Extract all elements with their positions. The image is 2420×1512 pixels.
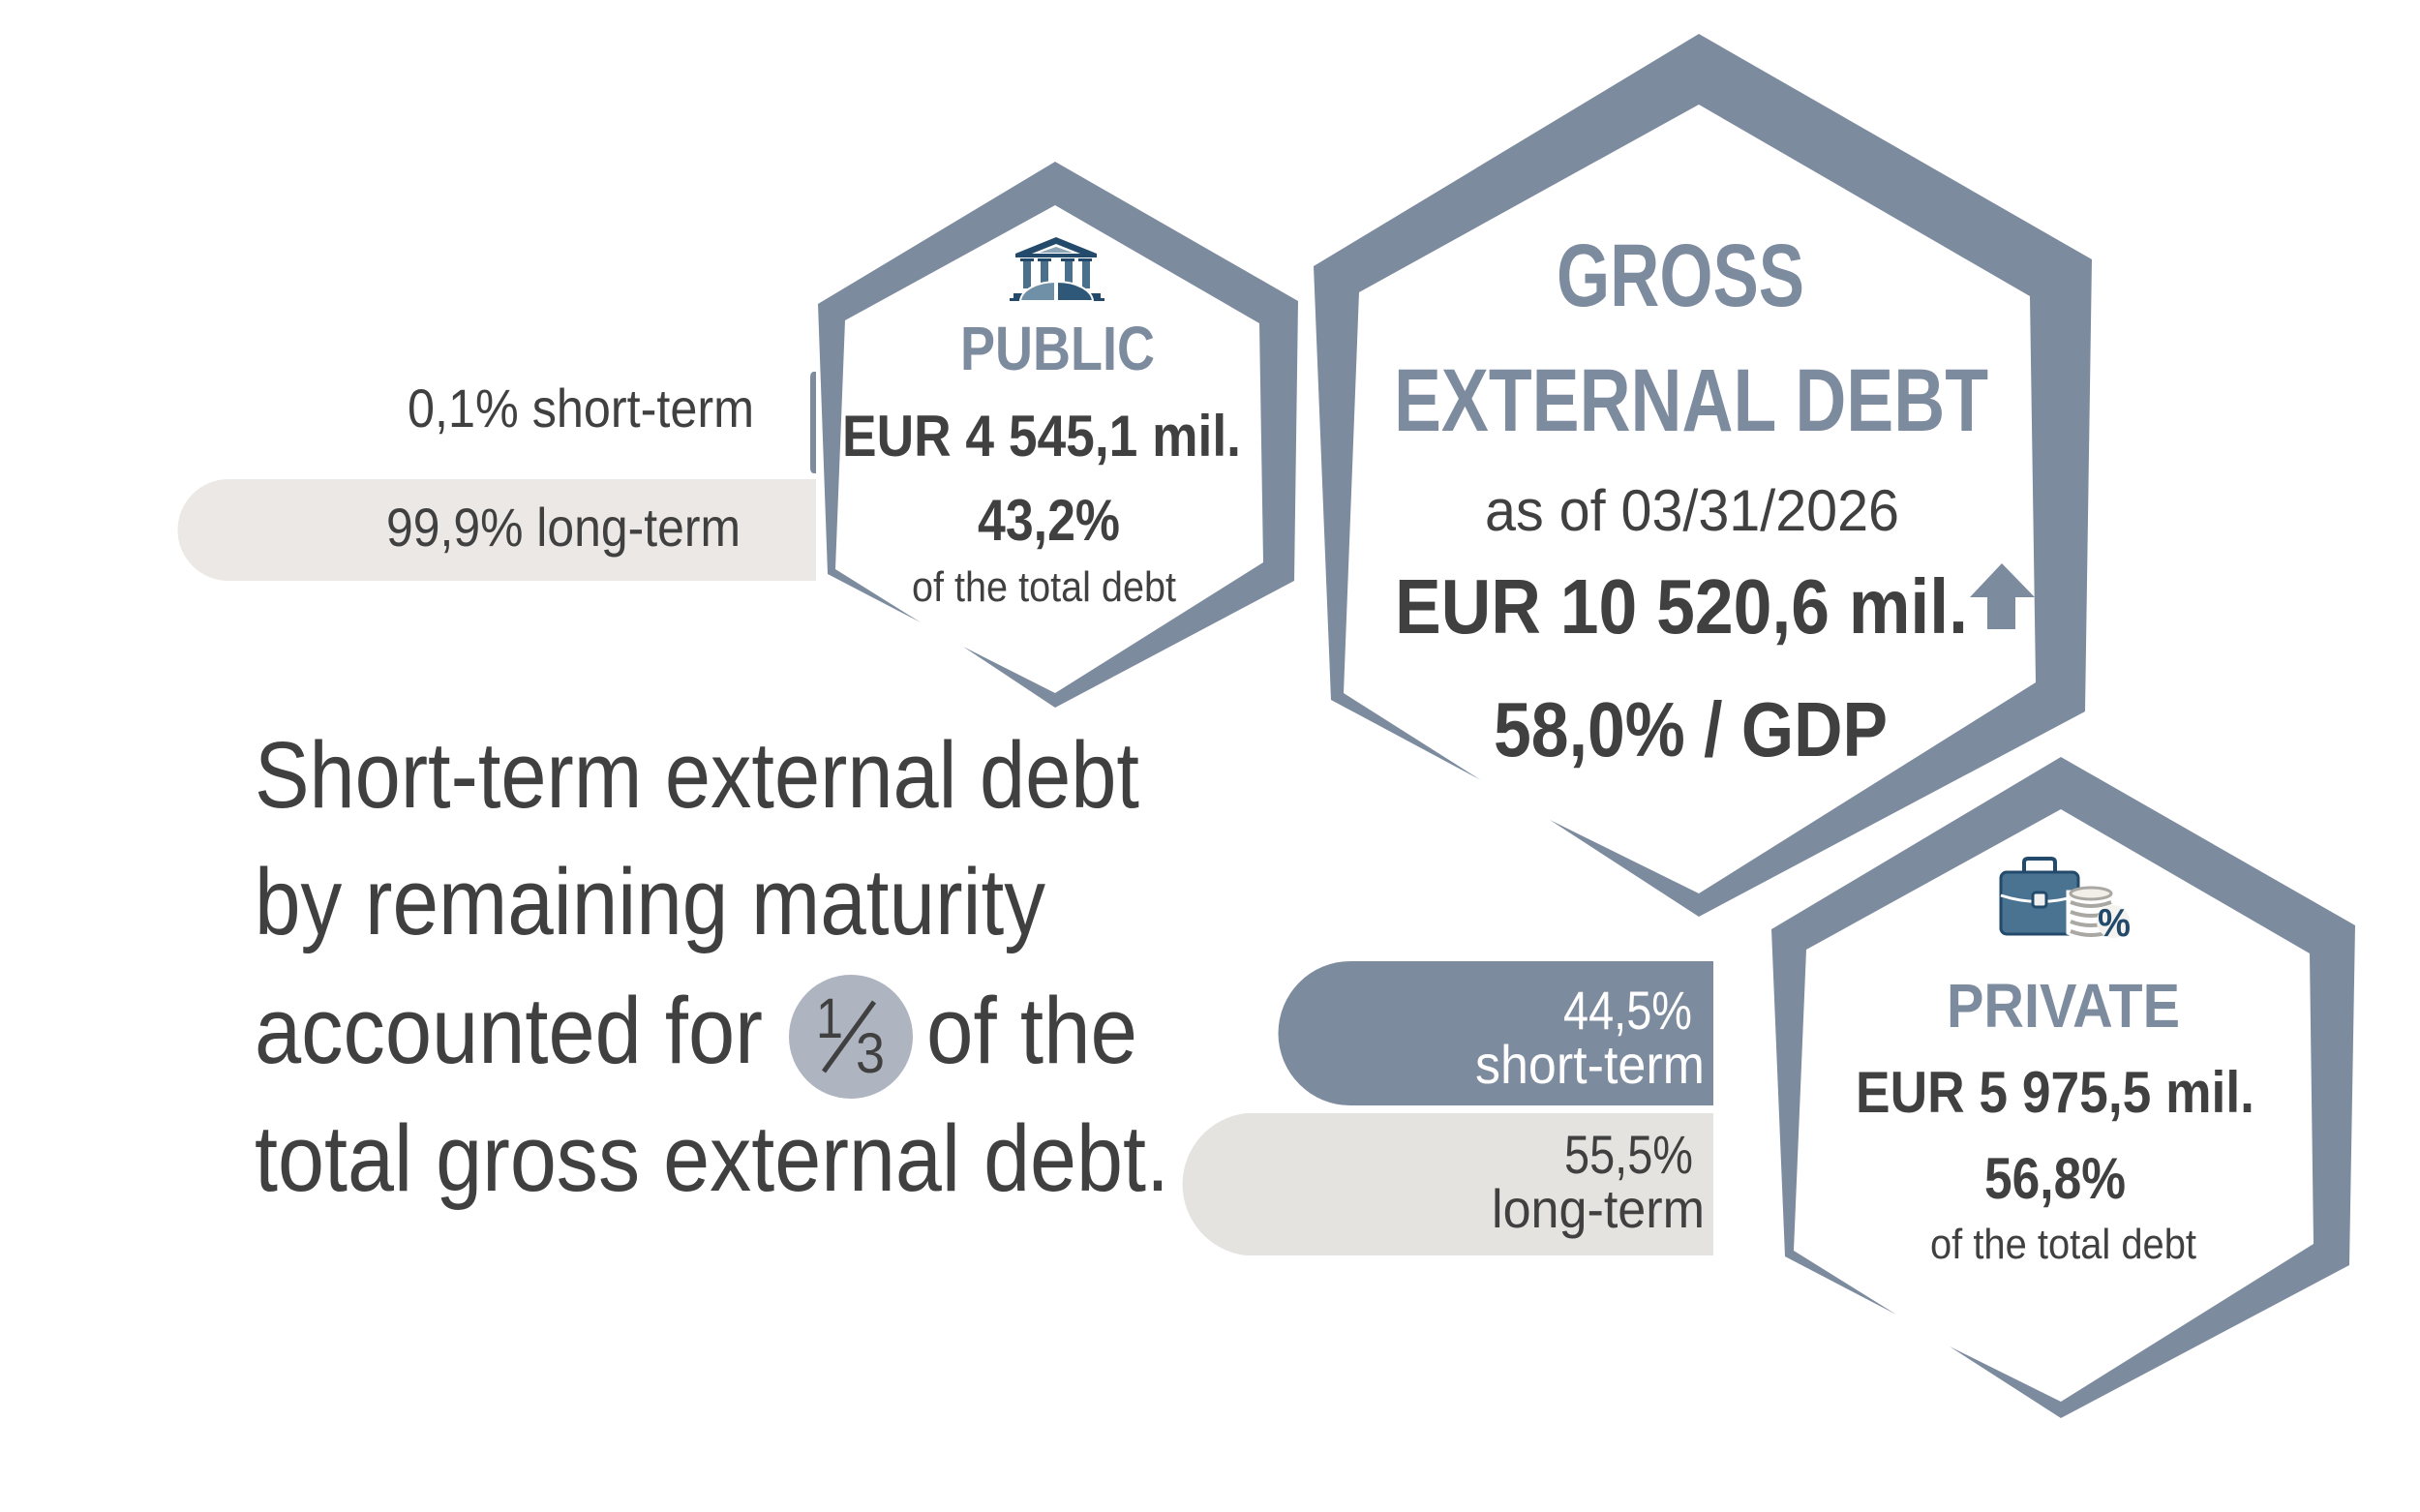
caption: private share: of the total debt xyxy=(1930,1221,2196,1268)
value: public share: 43,2% xyxy=(978,488,1120,553)
label: public short-term share: 0,1% short-term xyxy=(408,378,754,438)
hexagon frame: private xyxy=(1771,757,2355,1418)
bar: public long-term xyxy=(178,479,816,581)
icon: government building xyxy=(1010,237,1104,301)
bar: private long-term xyxy=(1183,1113,1713,1255)
label: private short-term percent: 44,5% xyxy=(1563,980,1692,1041)
bar: public short-term sliver xyxy=(810,372,816,473)
panel: gross external debt hexagon xyxy=(1314,34,2092,917)
label: public long-term share: 99,9% long-term xyxy=(386,497,741,558)
icon: briefcase with coins and percent: % xyxy=(2098,900,2131,945)
icon: up arrow xyxy=(1970,563,2035,629)
line 4: total gross external debt. xyxy=(255,1105,1169,1211)
badge: one third xyxy=(789,975,913,1099)
value: percent of GDP: 58,0% / GDP xyxy=(1494,686,1888,772)
date: as of 03/31/2026 xyxy=(1485,478,1899,543)
panel: public hexagon xyxy=(818,162,1298,708)
caption: public share: of the total debt xyxy=(912,563,1176,611)
panel: public long/short bars xyxy=(178,372,816,581)
hexagon frame: gross external debt xyxy=(1314,34,2092,917)
line 3 start: accounted for xyxy=(255,978,763,1083)
panel: private long/short bars xyxy=(1183,961,1713,1255)
panel: private hexagon xyxy=(1771,757,2355,1418)
value: private amount: EUR 5 975,5 mil. xyxy=(1856,1060,2254,1125)
bar: private short-term xyxy=(1278,961,1713,1105)
line 1: Short-term external debt xyxy=(255,722,1139,828)
badge: one third: 3 xyxy=(856,1022,885,1085)
icon: briefcase with coins and percent xyxy=(2001,859,2131,945)
label: private long-term: long-term xyxy=(1492,1178,1705,1239)
text block: short-term summary xyxy=(255,722,1169,1211)
label: private short-term: short-term xyxy=(1475,1034,1705,1095)
value: total amount: EUR 10 520,6 mil. xyxy=(1395,563,1968,650)
heading: gross: GROSS xyxy=(1557,227,1804,325)
badge: one third: 1 xyxy=(816,987,843,1050)
hexagon frame: public xyxy=(818,162,1298,708)
value: public amount: EUR 4 545,1 mil. xyxy=(842,404,1241,469)
line 2: by remaining maturity xyxy=(255,849,1045,954)
label: private long-term percent: 55,5% xyxy=(1564,1124,1693,1185)
heading: external debt: EXTERNAL DEBT xyxy=(1394,351,1988,450)
heading: private: PRIVATE xyxy=(1947,971,2180,1041)
value: private share: 56,8% xyxy=(1984,1146,2126,1211)
heading: public: PUBLIC xyxy=(960,314,1155,383)
line 3 end: of the xyxy=(926,978,1137,1083)
